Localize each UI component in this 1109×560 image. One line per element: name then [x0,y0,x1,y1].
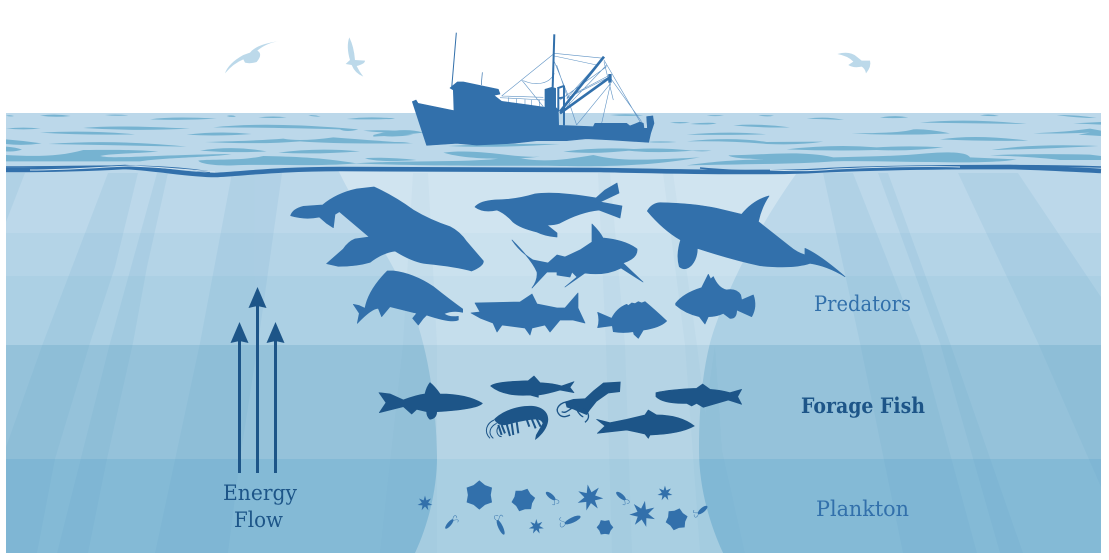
icon: tuna [353,271,463,325]
arrow: energy flow centre [248,287,266,473]
boat masts and booms [452,33,653,128]
label: predators: Predators [814,292,911,316]
label: energy flow: Energy [223,481,297,505]
label: plankton: Plankton [816,497,909,521]
icon: orca [647,196,845,277]
icon: forage fish 4 [597,410,694,438]
light rays [6,173,1101,553]
surface ripples: left [6,115,417,165]
surface ripples: right [687,114,1101,165]
sea surface [6,113,1101,170]
icon: salmon [471,293,585,335]
icon: rockfish [598,302,667,338]
surface ripples: middle [353,114,700,166]
icon: squid [557,382,621,422]
icon: seagull right [837,53,870,73]
arrow: energy flow right [266,322,284,473]
arrow: energy flow left [230,322,248,473]
icon: seagull left [225,41,280,73]
icon: humpback whale [291,187,483,271]
icon: forage fish 2 [491,376,574,397]
icon: krill [486,406,548,440]
icon: seagull middle [346,37,365,77]
boat hull and cabin [412,82,654,145]
icon: phytoplankton stars [418,480,689,538]
icon: forage fish 1 [379,383,482,419]
label: energy flow: Flow [234,508,283,532]
icon: grouper [676,274,755,324]
forage fish group [379,376,742,440]
icon: sea lion [475,183,622,237]
icon: shark [512,224,643,288]
icon: forage fish 3 [656,384,742,407]
label: forage fish: Forage Fish [801,393,925,418]
boat rigging [500,53,642,125]
faint rays in central column [380,173,745,553]
central light column [338,170,799,553]
underwater depth bands [6,170,1101,553]
predators group [291,183,845,338]
icon: fishing boat [412,33,654,145]
icon: copepods [444,490,709,536]
waterline [6,166,1101,175]
plankton group [418,480,709,538]
